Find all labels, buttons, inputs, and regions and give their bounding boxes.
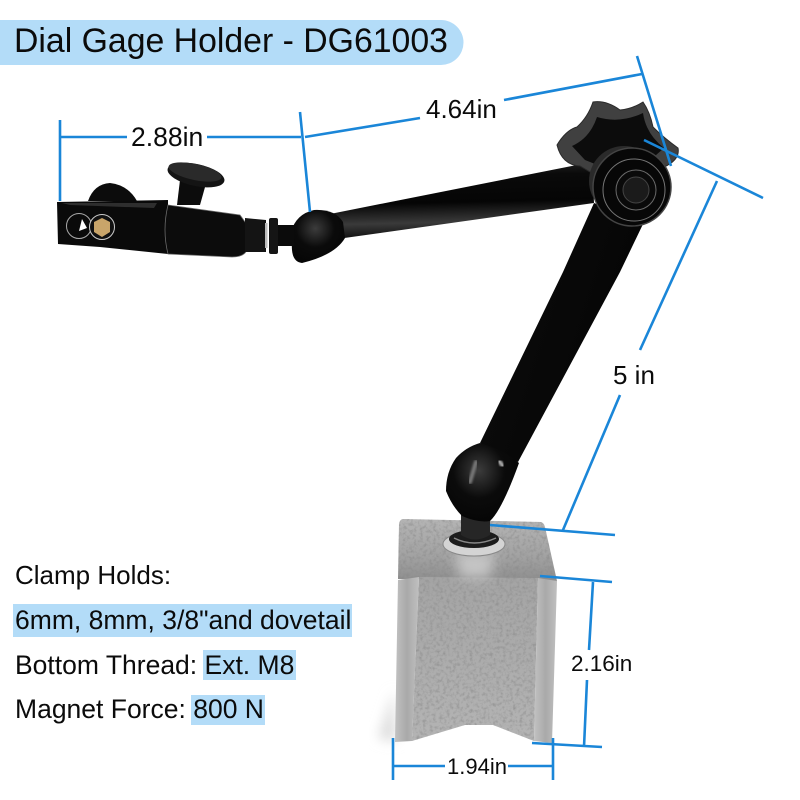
magnet force: Magnet Force: 800 N — [15, 694, 264, 724]
magnetic base — [378, 515, 557, 743]
star knob — [557, 102, 678, 190]
clamp — [57, 158, 294, 257]
rear disc — [88, 183, 137, 201]
bottom thread: Bottom Thread: Ext. M8 — [15, 650, 294, 680]
base front face — [412, 577, 538, 741]
dimension: 2.16in: 2.16in — [571, 651, 632, 676]
connector stud — [245, 218, 266, 252]
base shadow — [378, 690, 396, 742]
dimension: 1.94in — [393, 738, 553, 780]
dimension: 5 in — [490, 140, 763, 535]
upper arm — [291, 162, 594, 263]
title: Dial Gage Holder - DG61003 — [14, 22, 448, 60]
neck ball — [291, 210, 345, 263]
specs text block — [13, 560, 352, 725]
dimension: 2.16in — [532, 576, 632, 747]
clamp holds label: Clamp Holds: — [15, 560, 171, 590]
clamp rear body — [165, 205, 248, 257]
thumb screw head — [165, 158, 227, 192]
elbow joint — [589, 146, 671, 226]
brass screw — [90, 214, 114, 240]
jaw holes — [66, 214, 92, 238]
dimension: 2.88in — [60, 112, 310, 212]
base right rail — [534, 578, 557, 743]
thumb screw stem — [177, 180, 207, 205]
dimension: 2.88in: 2.88in — [131, 122, 203, 152]
base top face — [398, 519, 557, 581]
clamp jaw block — [57, 200, 168, 254]
knob inner — [572, 113, 664, 178]
dimension: 1.94in: 1.94in — [447, 754, 507, 779]
clamp sizes highlight: 6mm, 8mm, 3/8"and dovetail — [15, 605, 351, 635]
lower arm — [446, 203, 644, 521]
washer and nut — [443, 515, 505, 578]
dimension: 4.64in — [305, 56, 671, 166]
base left rail — [395, 577, 419, 742]
dimension: 4.64in: 4.64in — [426, 94, 497, 124]
dimension: 5 in: 5 in — [613, 360, 655, 390]
lower ball joint — [446, 443, 519, 521]
